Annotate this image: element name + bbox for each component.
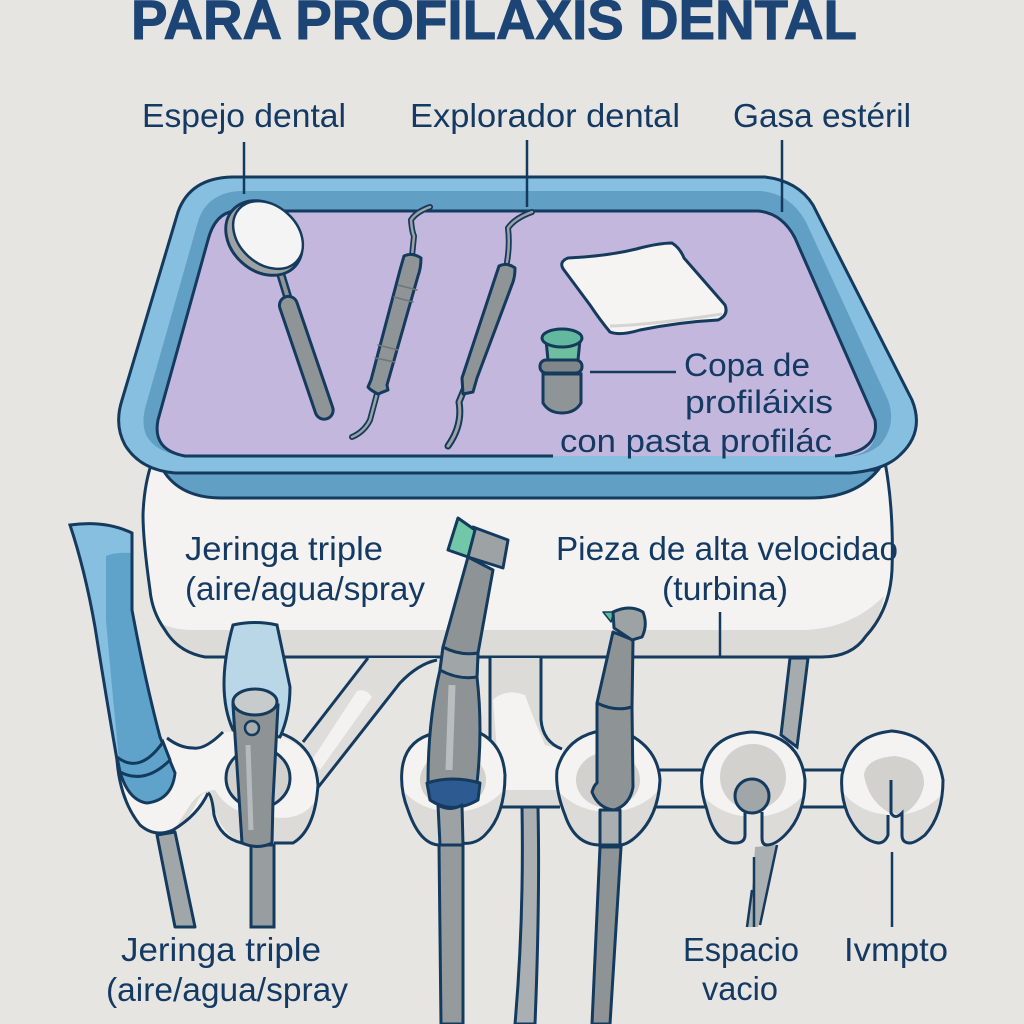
leader: turbine [719, 612, 721, 656]
label: Espejo dental: Espejo dental [142, 97, 346, 134]
label: Gasa estéril: Gasa estéril [733, 97, 911, 134]
center block [490, 658, 565, 807]
ejector band [117, 742, 170, 776]
spray tip thin hose [747, 845, 777, 927]
label: Jeringa triple upper: Jeringa triple [185, 530, 383, 567]
icon: dental mirror [211, 185, 324, 411]
label: Copa de profiláixis con pasta profilác: con pasta profilác [560, 423, 832, 459]
icon: saliva ejector holder [70, 524, 318, 843]
console body [143, 462, 892, 657]
icon: prophylaxis cup [540, 329, 582, 413]
holder 2 [402, 733, 505, 845]
holder 3 [557, 732, 660, 845]
label: Pieza de alta velocidad: Pieza de alta velocidao [556, 530, 898, 567]
label: Copa de profiláixis con pasta profilác [560, 347, 833, 459]
holder 5 [842, 731, 943, 843]
ejector tube outline [70, 524, 175, 803]
icon: air water syringe [224, 622, 290, 846]
tray rim [119, 177, 916, 473]
holder 4 [702, 732, 805, 845]
label: Jeringa triple lower [106, 931, 348, 1008]
label: Espacio vacio: vacio [702, 970, 778, 1007]
label: Jeringa triple upper [185, 530, 425, 607]
tray bed outline [157, 211, 876, 456]
label: Jeringa triple lower: (aire/agua/spray [106, 971, 348, 1008]
left arm [300, 658, 437, 790]
icon: low-speed handpiece [592, 608, 645, 845]
icon: sterile gauze [562, 243, 726, 334]
leaders bottom [754, 852, 892, 927]
label: Jeringa triple upper: (aire/agua/spray [185, 570, 425, 607]
leader: cup [590, 371, 676, 373]
tray lower band [163, 470, 878, 498]
tray inner wall [144, 191, 891, 456]
icon: explorer 2 [448, 212, 532, 446]
support arms [300, 658, 848, 807]
label: Ivmpto: Ivmpto [844, 931, 948, 968]
label: Espacio vacio [683, 931, 799, 1007]
tray bed [157, 211, 876, 456]
label: Pieza de alta velocidad: (turbina) [662, 570, 788, 607]
ejector tube shade [106, 553, 173, 802]
right strut [781, 658, 808, 747]
label: Jeringa triple lower: Jeringa triple [121, 931, 321, 968]
icon: high-speed handpiece [427, 518, 508, 845]
label: Copa de profiláixis con pasta profilác: profiláixis [685, 384, 833, 420]
leader lines top [244, 140, 782, 212]
icon: explorer 1 [352, 207, 430, 437]
label: Pieza de alta velocidad [556, 530, 898, 607]
hoses [157, 807, 621, 1024]
bar 3-4 [655, 770, 710, 807]
tray [119, 177, 916, 498]
bar 4-5 [800, 770, 848, 807]
label: Espacio vacio: Espacio [683, 931, 799, 968]
label: Copa de profiláixis con pasta profilác: Copa de [684, 347, 810, 383]
label: Explorador dental: Explorador dental [410, 97, 680, 134]
ejector tube [70, 524, 175, 803]
